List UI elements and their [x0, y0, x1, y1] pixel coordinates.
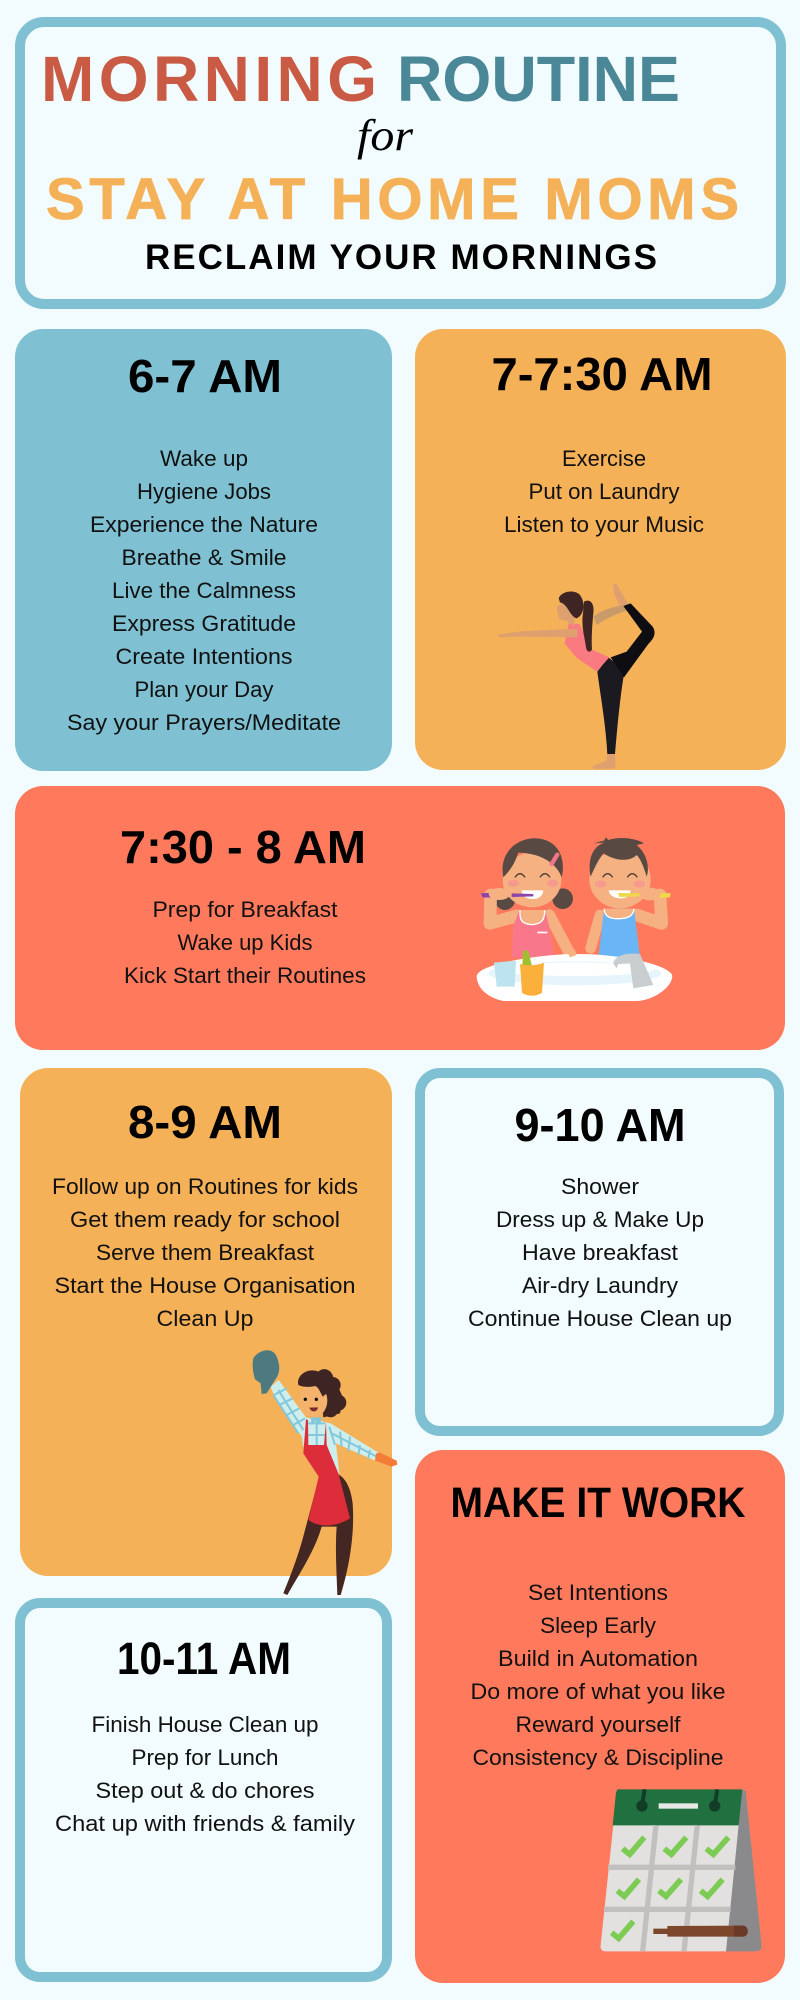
task list: [67, 446, 341, 735]
title: morning routine: [41, 43, 680, 115]
task list: Finish House Clean up: [92, 1712, 318, 1737]
task list: [124, 897, 366, 988]
task list: Express Gratitude: [112, 611, 296, 636]
heading: 6-7 AM: 6-7 AM: [128, 350, 282, 402]
task list: Follow up on Routines for kids: [52, 1174, 358, 1199]
task list: Hygiene Jobs: [137, 479, 271, 504]
panel: 6-7 AM: [15, 329, 392, 771]
task list: Say your Prayers/Meditate: [67, 710, 341, 735]
tips list: Set Intentions: [528, 1580, 668, 1605]
task list: Prep for Breakfast: [152, 897, 338, 922]
heading: 7:30 - 8 AM: 7:30 - 8 AM: [120, 821, 366, 873]
tips list: [470, 1580, 726, 1770]
task list: [52, 1174, 358, 1331]
task list: Create Intentions: [116, 644, 292, 669]
task list: Experience the Nature: [90, 512, 318, 537]
task list: Get them ready for school: [70, 1207, 340, 1232]
icon: children brushing teeth at a sink: [477, 837, 672, 1001]
tips list: Sleep Early: [540, 1613, 656, 1638]
heading: 10-11 AM: 10-11 AM: [117, 1633, 291, 1684]
heading: 9-10 AM: 9-10 AM: [514, 1099, 686, 1151]
subtitle: RECLAIM YOUR MORNINGS: [145, 238, 657, 277]
task list: Air-dry Laundry: [522, 1273, 678, 1298]
face: [299, 1384, 327, 1417]
script word: for: for: [357, 111, 414, 160]
curly hair fringe: [298, 1369, 334, 1397]
panel: make it work: [415, 1450, 785, 1983]
task list: Breathe & Smile: [122, 545, 286, 570]
task list: Plan your Day: [134, 677, 274, 702]
task list: Start the House Organisation: [54, 1273, 356, 1298]
task list: Wake up: [160, 446, 248, 471]
task list: Exercise: [562, 446, 646, 471]
task list: Shower: [561, 1174, 639, 1199]
task list: Put on Laundry: [528, 479, 680, 504]
task list: Wake up Kids: [178, 930, 312, 955]
task list: [468, 1174, 732, 1331]
task list: [504, 446, 704, 537]
panel: 7:30 - 8 AM: [15, 786, 785, 1050]
heading: 7-7:30 AM: 7-7:30 AM: [492, 348, 712, 400]
task list: Chat up with friends & family: [55, 1811, 355, 1836]
task list: Clean Up: [156, 1306, 254, 1331]
task list: [55, 1712, 355, 1836]
task list: Listen to your Music: [504, 512, 704, 537]
task list: Have breakfast: [522, 1240, 678, 1265]
panel: 7-7:30 AM: [415, 329, 786, 770]
panel: 9-10 AM: [420, 1073, 779, 1431]
task list: Serve them Breakfast: [96, 1240, 314, 1265]
panel: 8-9 AM: [20, 1068, 392, 1576]
tips list: Build in Automation: [498, 1646, 698, 1671]
panel: 10-11 AM: [20, 1603, 387, 1977]
icon: woman dusting in apron: [253, 1350, 397, 1595]
heading: make it work: MAKE IT WORK: [450, 1479, 746, 1527]
tips list: Consistency & Discipline: [472, 1745, 724, 1770]
task list: Prep for Lunch: [132, 1745, 278, 1770]
task list: Kick Start their Routines: [124, 963, 366, 988]
curly hair back: [320, 1377, 346, 1417]
title: morning routine: MORNING: [41, 43, 377, 115]
tips list: Do more of what you like: [470, 1679, 726, 1704]
title: stay at home moms: STAY AT HOME MOMS: [46, 167, 739, 232]
icon: calendar with check marks and pen: [601, 1789, 762, 1951]
task list: Dress up & Make Up: [496, 1207, 704, 1232]
heading: 8-9 AM: 8-9 AM: [128, 1096, 282, 1148]
task list: Continue House Clean up: [468, 1306, 732, 1331]
title: morning routine: ROUTINE: [397, 43, 680, 115]
icon: woman in yoga dancer pose: [497, 583, 655, 769]
tips list: Reward yourself: [516, 1712, 681, 1737]
task list: Step out & do chores: [96, 1778, 314, 1803]
panel: title header: [20, 22, 781, 304]
task list: Live the Calmness: [112, 578, 296, 603]
